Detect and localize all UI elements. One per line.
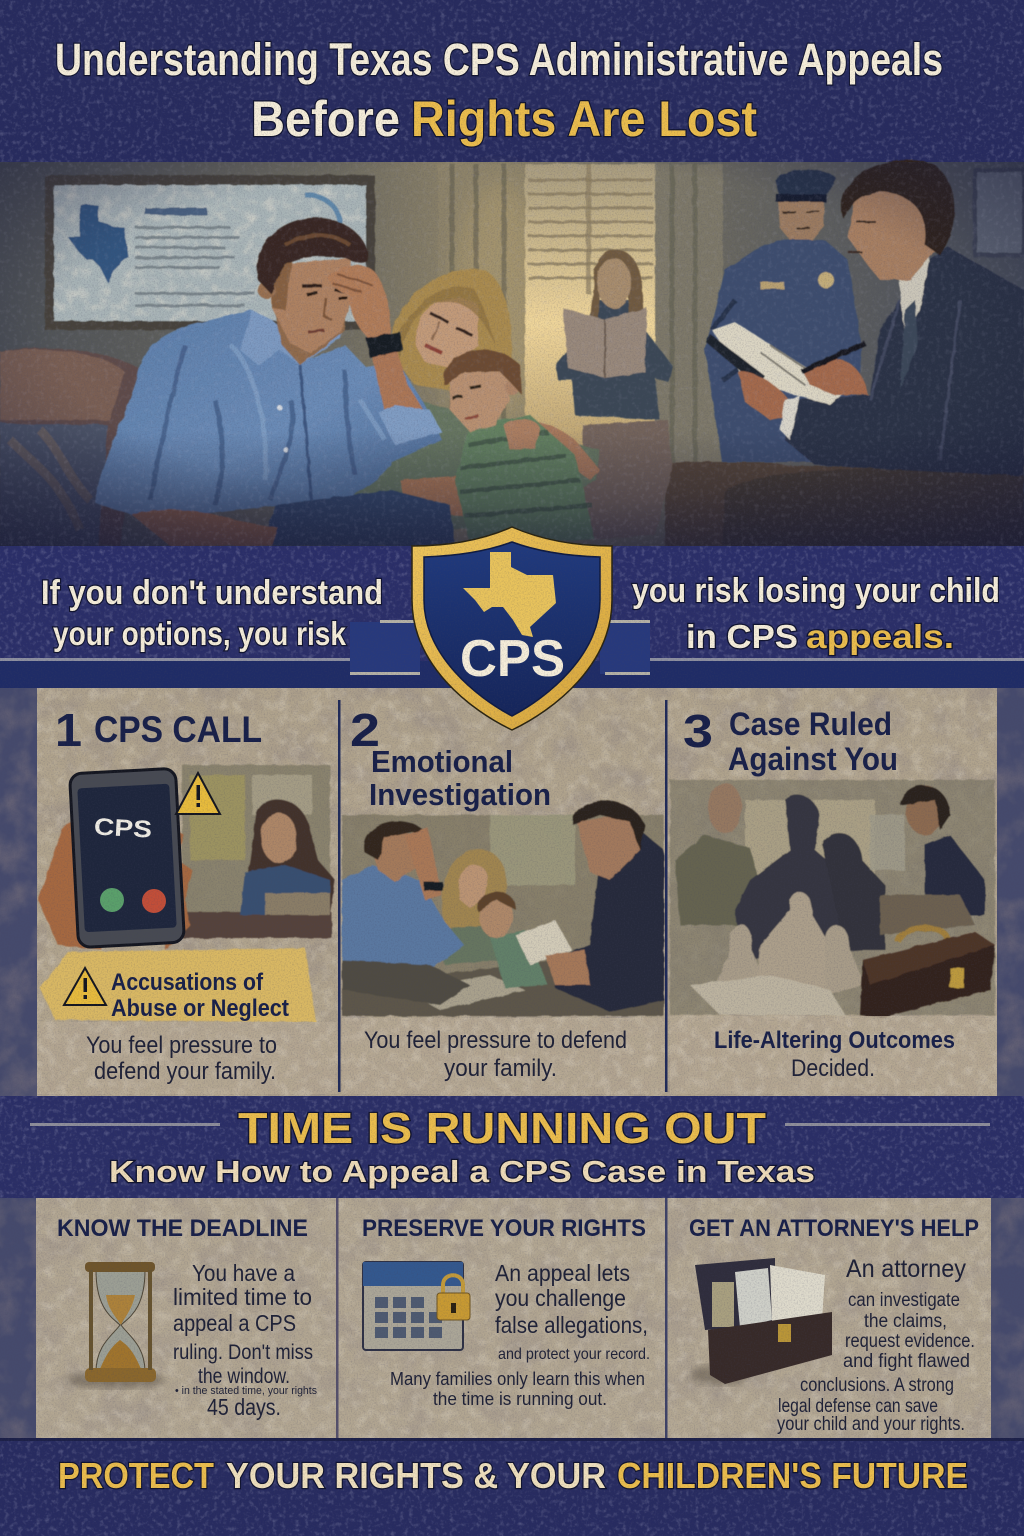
step 2 caption: You feel pressure to defend — [364, 1027, 627, 1054]
footer slogan: YOUR RIGHTS & YOUR — [226, 1455, 606, 1496]
card: know the deadline: ruling. Don't miss — [173, 1341, 313, 1364]
panel: time is running out band — [0, 1096, 1024, 1198]
slogan right: in CPS — [686, 618, 798, 655]
card: know the deadline: limited time to — [173, 1284, 312, 1310]
warning triangle icon — [176, 773, 220, 814]
card: get an attorney's help: can investigate — [848, 1290, 960, 1311]
attorney — [555, 830, 664, 1012]
icon: calendar with padlock — [363, 1262, 470, 1350]
office background — [180, 765, 335, 938]
card: preserve your rights — [362, 1215, 650, 1409]
panel: footer band — [0, 1438, 1024, 1536]
step 3 caption: Life-Altering Outcomes — [714, 1027, 955, 1054]
step 3 caption: Decided. — [791, 1055, 875, 1082]
step 3 heading — [683, 705, 898, 777]
window with blinds and curtains — [438, 164, 1024, 464]
card: preserve your rights: false allegations, — [495, 1312, 648, 1338]
step 2 caption — [342, 1018, 664, 1094]
step 3 illustration — [670, 780, 995, 1015]
card: know the deadline: • in the stated time, your rights — [175, 1385, 317, 1397]
step 1 illustration — [38, 765, 335, 950]
slogan left: If you don't understand — [41, 574, 383, 612]
step 3 heading: Against You — [728, 741, 898, 777]
card: know the deadline: KNOW THE DEADLINE — [57, 1215, 308, 1242]
card: preserve your rights: and protect your record. — [498, 1346, 650, 1363]
slogan left: your options, you risk — [53, 615, 347, 652]
step 1 heading — [55, 704, 262, 756]
step 2 heading: 2 — [350, 704, 380, 756]
slogan left — [41, 574, 383, 652]
card: get an attorney's help — [689, 1215, 979, 1435]
footer slogan: CHILDREN'S FUTURE — [617, 1455, 968, 1496]
step 2 illustration — [342, 801, 664, 1016]
title: Rights Are Lost — [411, 91, 757, 147]
step 1 heading: CPS CALL — [94, 709, 262, 750]
time heading: TIME IS RUNNING OUT — [238, 1104, 766, 1153]
hand holding phone — [38, 815, 192, 950]
card: know the deadline: appeal a CPS — [173, 1310, 296, 1336]
table — [342, 960, 664, 1016]
step 1 heading: 1 — [55, 704, 82, 756]
slogan right: appeals. — [806, 618, 954, 655]
step 1 caption: You feel pressure to — [86, 1032, 277, 1059]
left couch — [0, 348, 145, 546]
documents — [690, 975, 845, 1015]
card: preserve your rights: An appeal lets — [495, 1260, 630, 1286]
card: know the deadline: You have a — [192, 1260, 295, 1286]
card: get an attorney's help: and fight flawed — [843, 1351, 970, 1372]
step 1 banner: accusations: Accusations of — [111, 969, 264, 996]
boy — [490, 930, 548, 988]
step 3 heading: 3 — [683, 705, 713, 757]
father — [95, 218, 455, 546]
desk — [880, 895, 975, 935]
father — [342, 865, 464, 990]
card: know the deadline — [57, 1215, 317, 1420]
icon: hourglass — [65, 1262, 165, 1388]
CPS label: CPS — [460, 630, 565, 688]
phone: CPS — [93, 814, 153, 844]
card: preserve your rights: you challenge — [495, 1285, 626, 1311]
panel: action backdrop — [0, 1198, 1024, 1440]
slogan right — [632, 572, 1000, 655]
step 2 heading: Emotional — [371, 744, 513, 779]
card: get an attorney's help: request evidence. — [845, 1331, 975, 1352]
step 3 heading: Case Ruled — [729, 706, 892, 742]
step 1 banner: accusations — [40, 948, 316, 1022]
step 1 caption — [37, 1022, 337, 1094]
mother — [442, 849, 507, 935]
card: get an attorney's help: the claims, — [864, 1311, 947, 1332]
card: know the deadline: the window. — [198, 1365, 290, 1388]
scene shading — [0, 162, 1024, 546]
footer slogan — [58, 1455, 968, 1496]
step 1 banner: accusations: Abuse or Neglect — [111, 995, 289, 1022]
time subheading: Know How to Appeal a CPS Case in Texas — [109, 1154, 815, 1189]
card: preserve your rights: Many families only learn this when — [390, 1369, 645, 1389]
card: get an attorney's help: your child and your rights. — [777, 1414, 965, 1435]
police officer — [705, 170, 862, 462]
title — [55, 34, 943, 147]
framed texas poster — [45, 175, 375, 330]
card: preserve your rights: PRESERVE YOUR RIGHTS — [362, 1215, 646, 1242]
panel: timeline backdrop — [0, 688, 1024, 1096]
card: get an attorney's help: legal defense can save — [778, 1396, 938, 1417]
card: preserve your rights: the time is running out. — [433, 1389, 607, 1409]
phone — [70, 768, 184, 948]
panel: title band — [0, 0, 1024, 162]
icon: file case — [690, 1258, 832, 1385]
texas state — [463, 552, 556, 637]
step 2 caption: your family. — [444, 1055, 557, 1082]
footer slogan: PROTECT — [58, 1455, 214, 1496]
silhouette children — [710, 924, 765, 1000]
pillow — [583, 420, 672, 540]
panel: family scene illustration — [0, 160, 1024, 546]
girl with book — [556, 249, 672, 420]
mother — [320, 269, 600, 530]
card: get an attorney's help: conclusions. A strong — [800, 1375, 954, 1396]
attorney — [925, 835, 985, 915]
silhouette adults — [735, 795, 860, 960]
card: get an attorney's help: GET AN ATTORNEY'S HELP — [689, 1215, 979, 1242]
icon: briefcase — [860, 928, 995, 1018]
step 2 heading: Investigation — [369, 777, 551, 812]
soldier — [675, 835, 765, 925]
step 2 heading — [350, 704, 551, 812]
panel: slogan band — [0, 546, 1024, 688]
icon: CPS shield — [412, 527, 612, 730]
title: Before — [251, 91, 400, 147]
attorney with notepad — [706, 160, 1024, 476]
card: get an attorney's help: An attorney — [846, 1255, 966, 1283]
card: know the deadline: 45 days. — [207, 1394, 281, 1420]
documents — [405, 975, 525, 1010]
right couch — [665, 462, 1024, 546]
step 3 caption — [670, 1016, 997, 1094]
boy — [444, 349, 595, 546]
step 1 caption: defend your family. — [94, 1058, 276, 1085]
